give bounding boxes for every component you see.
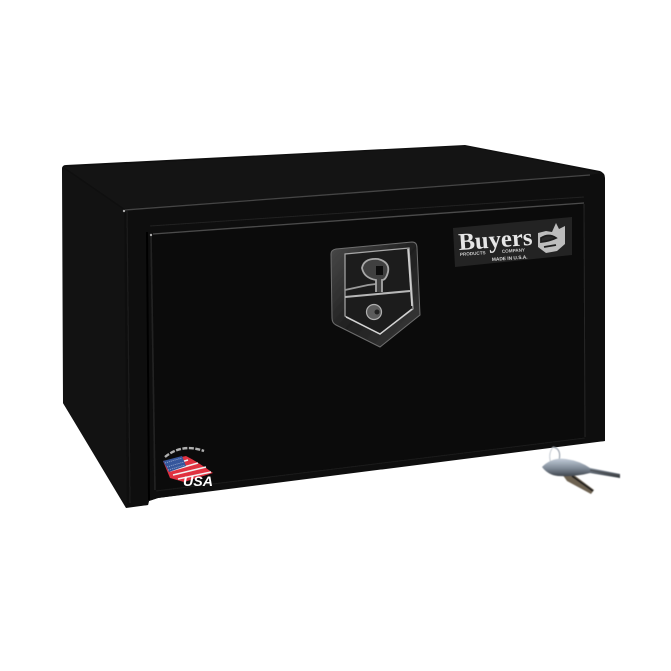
- lock outer plate: [331, 242, 420, 347]
- lock handle bar: [345, 291, 410, 297]
- USA text: USA: [183, 474, 213, 489]
- top panel: [64, 146, 601, 209]
- icon: bulldog logo: [538, 223, 565, 253]
- lock T handle: [362, 259, 388, 292]
- Made in USA flag badge: [163, 448, 213, 489]
- large key: [542, 459, 620, 478]
- badge arc text: [165, 448, 204, 457]
- small key: [562, 472, 594, 494]
- keys: [542, 447, 620, 494]
- left side panel: [63, 168, 127, 507]
- label company text: COMPANY: [502, 247, 525, 254]
- Buyers label: [453, 217, 572, 267]
- box body: [62, 145, 605, 508]
- label products text: PRODUCTS: [460, 250, 486, 257]
- key ring: [553, 447, 560, 464]
- front frame: [125, 174, 605, 507]
- box silhouette: [62, 145, 605, 508]
- label background: [453, 217, 572, 267]
- flag: [163, 456, 213, 482]
- chrome T-handle lock plate: [331, 242, 420, 347]
- Buyers wordmark: Buyers: [458, 225, 533, 256]
- door panel: [152, 204, 585, 490]
- lock screw: [366, 304, 382, 320]
- made in USA text: MADE IN U.S.A.: [492, 255, 528, 263]
- lock inner recess: [345, 248, 413, 334]
- frame and door highlights: [125, 175, 590, 503]
